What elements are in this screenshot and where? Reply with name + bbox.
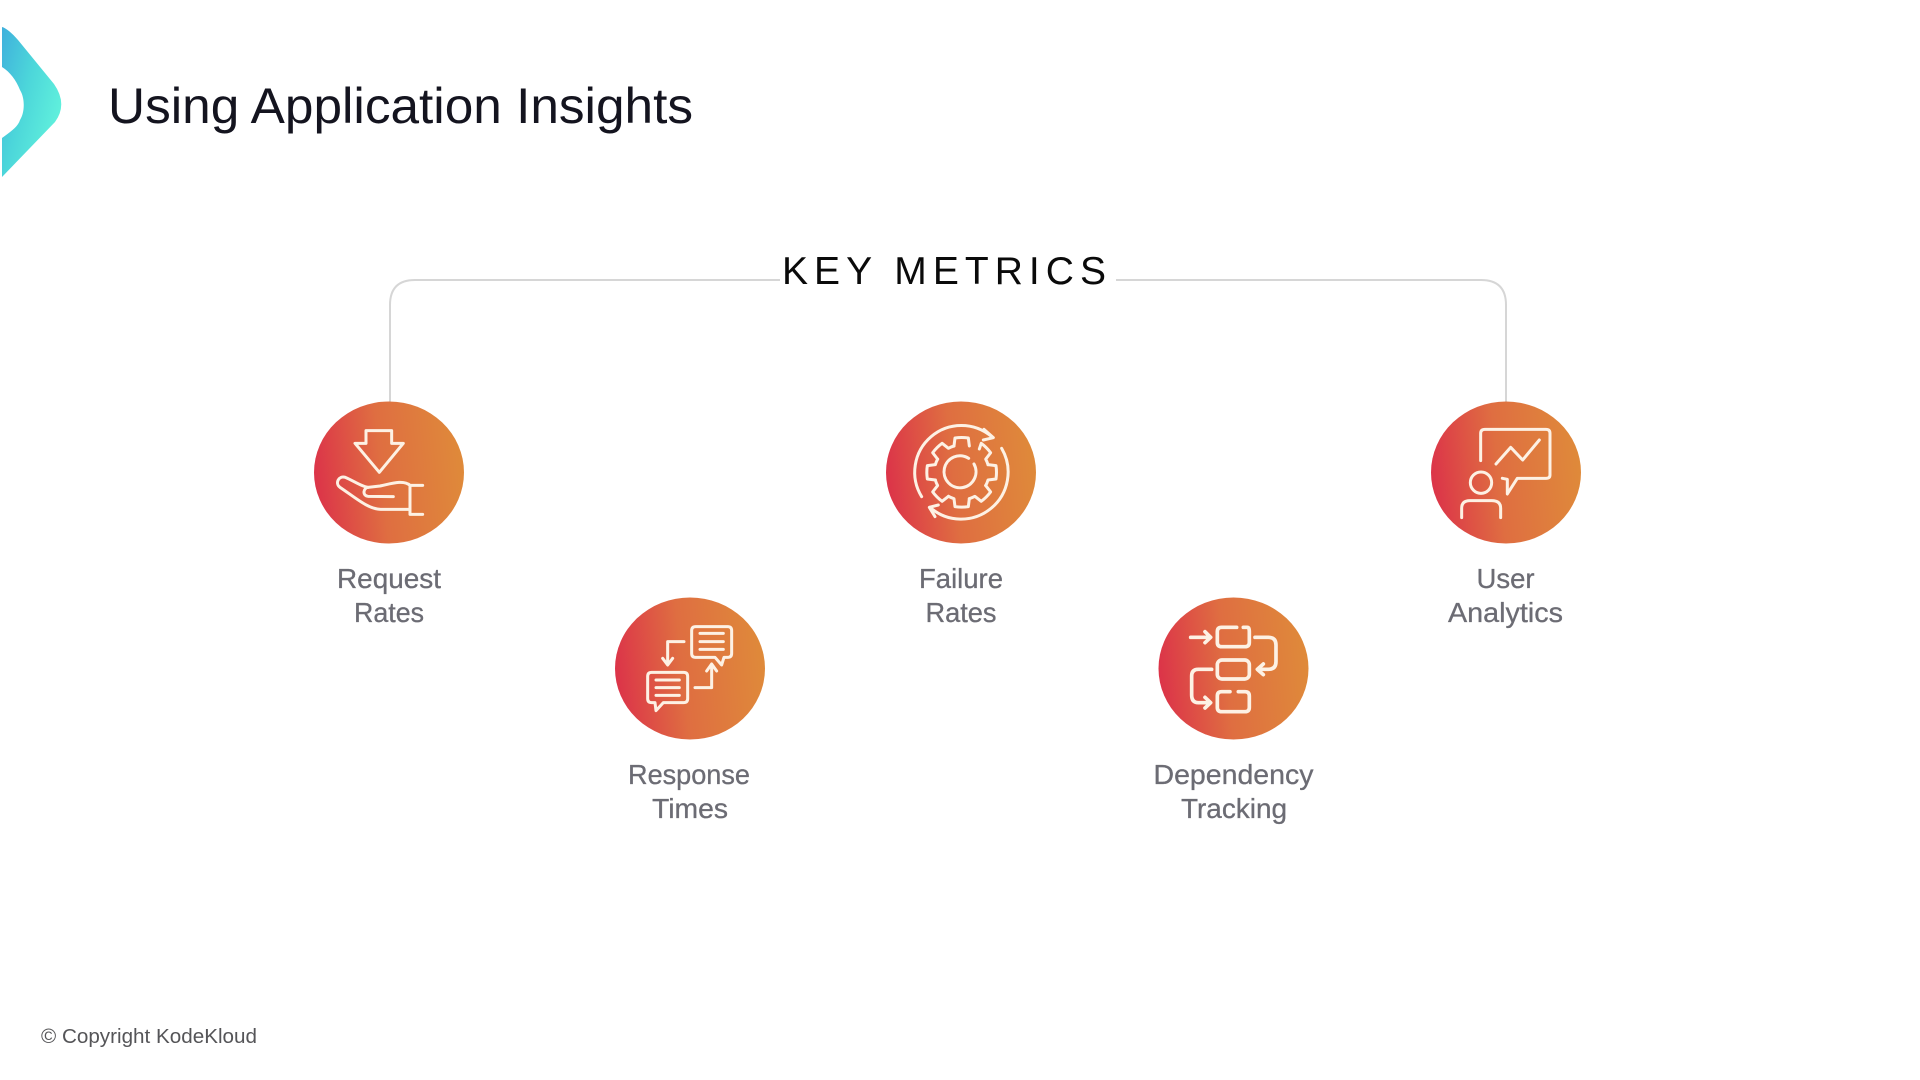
footer copyright: © Copyright KodeKloud	[41, 1026, 257, 1048]
heading: key metrics: KEY METRICS	[782, 250, 1106, 293]
title: Using Application Insights	[108, 78, 693, 134]
badge: user analytics	[1431, 402, 1581, 544]
metric: request rates	[314, 402, 464, 628]
logo chevron	[2, 27, 61, 177]
badge: dependency tracking	[1158, 598, 1308, 740]
label: response times: Times	[652, 793, 728, 824]
icon: gear with circular arrows	[915, 426, 1008, 519]
metric: failure rates	[886, 402, 1036, 628]
icon: chat bubbles exchange	[648, 627, 732, 711]
label: dependency tracking: Dependency	[1154, 759, 1314, 790]
label: failure rates: Rates	[926, 597, 996, 628]
badge: response times	[615, 598, 765, 740]
badge: failure rates	[886, 402, 1036, 544]
icon: user with chart bubble	[1462, 429, 1550, 518]
label: request rates: Rates	[354, 597, 424, 628]
metric: response times	[615, 598, 765, 824]
icon: hand receiving down arrow	[338, 431, 423, 514]
badge: request rates	[314, 402, 464, 544]
label: user analytics: Analytics	[1448, 597, 1563, 628]
label: user analytics: User	[1476, 563, 1534, 594]
connector bracket	[390, 280, 1506, 402]
label: request rates: Request	[337, 563, 441, 594]
icon: flow of linked boxes	[1191, 627, 1276, 712]
label: dependency tracking: Tracking	[1181, 793, 1287, 824]
label: failure rates: Failure	[919, 563, 1003, 594]
label: response times: Response	[628, 759, 750, 790]
metric: dependency tracking	[1154, 598, 1314, 824]
metric: user analytics	[1431, 402, 1581, 628]
